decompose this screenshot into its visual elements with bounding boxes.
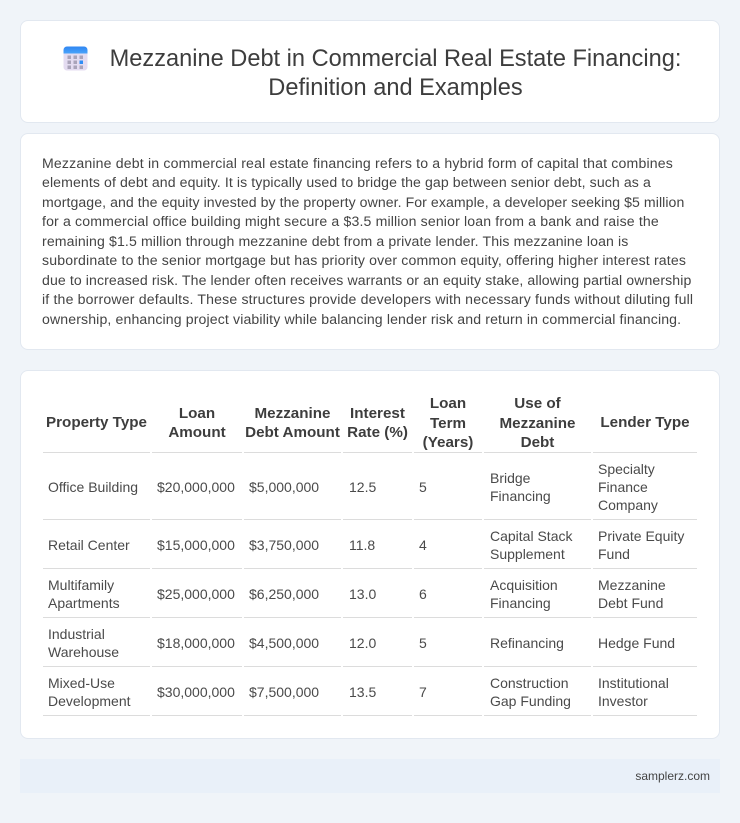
row: retail center: Fund: [598, 546, 630, 562]
row: mixed-use development: Development: [48, 693, 130, 709]
row: mixed-use development: Institutional: [598, 675, 669, 691]
row: office building: Office Building: [48, 479, 138, 495]
row: industrial warehouse: $18,000,000: [157, 635, 235, 651]
row: retail center: [48, 528, 684, 562]
intro text: due to increased risk. The lender often receives warrants or an equity stake, allowing partial ownership: [42, 272, 691, 288]
row: office building: Finance: [598, 479, 648, 495]
title: [110, 46, 681, 100]
intro panel: [20, 133, 720, 350]
header card: [20, 20, 720, 123]
row: office building: $5,000,000: [249, 479, 319, 495]
icon: calendar: [64, 46, 88, 70]
row: multifamily apartments: Acquisition: [490, 577, 558, 593]
row: mixed-use development: [48, 675, 669, 709]
table header: [46, 395, 690, 451]
row: mixed-use development: Gap Funding: [490, 693, 571, 709]
table header: Mezzanine: [500, 414, 575, 432]
title: Definition and Examples: [268, 74, 523, 100]
row: office building: 5: [419, 479, 427, 495]
row: multifamily apartments: 6: [419, 586, 427, 602]
row: industrial warehouse: Hedge Fund: [598, 635, 675, 651]
table panel: [20, 370, 720, 739]
table header: Mezzanine: [255, 404, 330, 422]
row: multifamily apartments: Financing: [490, 595, 551, 611]
row: mixed-use development: Mixed-Use: [48, 675, 115, 691]
row: retail center: Capital Stack: [490, 528, 572, 544]
table header: Use of: [514, 395, 561, 412]
row: office building: [48, 461, 658, 513]
row: mixed-use development: 7: [419, 684, 427, 700]
row: multifamily apartments: 13.0: [349, 586, 376, 602]
title: Mezzanine Debt in Commercial Real Estate Financing:: [110, 46, 681, 72]
table header: Loan: [430, 395, 466, 412]
row: industrial warehouse: Industrial: [48, 626, 105, 642]
row: multifamily apartments: Mezzanine: [598, 577, 666, 593]
row: industrial warehouse: $4,500,000: [249, 635, 319, 651]
table header: Debt: [521, 434, 554, 451]
row: multifamily apartments: Apartments: [48, 595, 120, 611]
row: retail center: 4: [419, 537, 427, 553]
row: mixed-use development: 13.5: [349, 684, 376, 700]
table header: Amount: [168, 424, 226, 441]
row: multifamily apartments: $25,000,000: [157, 586, 235, 602]
row: mixed-use development: Investor: [598, 693, 648, 709]
intro text: mortgage, and the equity invested by the property owner. For example, a developer seeking $5 million: [42, 194, 684, 210]
row: industrial warehouse: Refinancing: [490, 635, 564, 651]
row: industrial warehouse: 5: [419, 635, 427, 651]
table header: Property Type: [46, 414, 147, 431]
row: industrial warehouse: Warehouse: [48, 644, 119, 660]
row: industrial warehouse: [48, 626, 675, 660]
row: office building: $20,000,000: [157, 479, 235, 495]
row: multifamily apartments: Debt Fund: [598, 595, 663, 611]
row: multifamily apartments: $6,250,000: [249, 586, 319, 602]
intro text: if the borrower defaults. These structures provide developers with necessary funds without diluting full: [42, 291, 693, 307]
row: office building: Bridge: [490, 470, 530, 486]
row: retail center: Retail Center: [48, 537, 130, 553]
table header: Rate (%): [347, 424, 408, 441]
intro text: subordinate to the senior mortgage but has priority over common equity, offering higher interest rates: [42, 252, 686, 268]
table header: Interest: [350, 404, 405, 422]
row: retail center: Private Equity: [598, 528, 684, 544]
row: retail center: Supplement: [490, 546, 565, 562]
row: mixed-use development: $7,500,000: [249, 684, 319, 700]
intro text: ownership, enhancing project viability while balancing lender risk and return in commercial financing.: [42, 310, 681, 326]
row: retail center: $15,000,000: [157, 537, 235, 553]
table header: (Years): [423, 434, 473, 451]
row: retail center: 11.8: [349, 537, 375, 553]
row: industrial warehouse: 12.0: [349, 635, 376, 651]
footer text: samplerz.com: [635, 769, 710, 783]
intro text: for a commercial office building might secure a $3.5 million senior loan from a bank and raise the: [42, 213, 659, 229]
table header: Term: [430, 414, 466, 432]
row: office building: 12.5: [349, 479, 376, 495]
row: mixed-use development: $30,000,000: [157, 684, 235, 700]
row: office building: Company: [598, 497, 658, 513]
table header: Lender Type: [600, 414, 690, 431]
intro text: elements of debt and equity. It is typically used to bridge the gap between senior debt, such as a: [42, 174, 651, 190]
intro text: [42, 154, 693, 327]
footer bar: [20, 759, 720, 793]
row: multifamily apartments: Multifamily: [48, 577, 114, 593]
row: office building: Specialty: [598, 461, 655, 477]
row: office building: Financing: [490, 488, 551, 504]
table header: Loan: [179, 404, 215, 422]
table header: Debt Amount: [245, 424, 340, 441]
row: retail center: $3,750,000: [249, 537, 319, 553]
row: multifamily apartments: [48, 577, 666, 611]
row: mixed-use development: Construction: [490, 675, 569, 691]
intro text: Mezzanine debt in commercial real estate financing refers to a hybrid form of capital that combines: [42, 154, 673, 170]
intro text: remaining $1.5 million through mezzanine debt from a private lender. This mezzanine loan is: [42, 232, 628, 248]
